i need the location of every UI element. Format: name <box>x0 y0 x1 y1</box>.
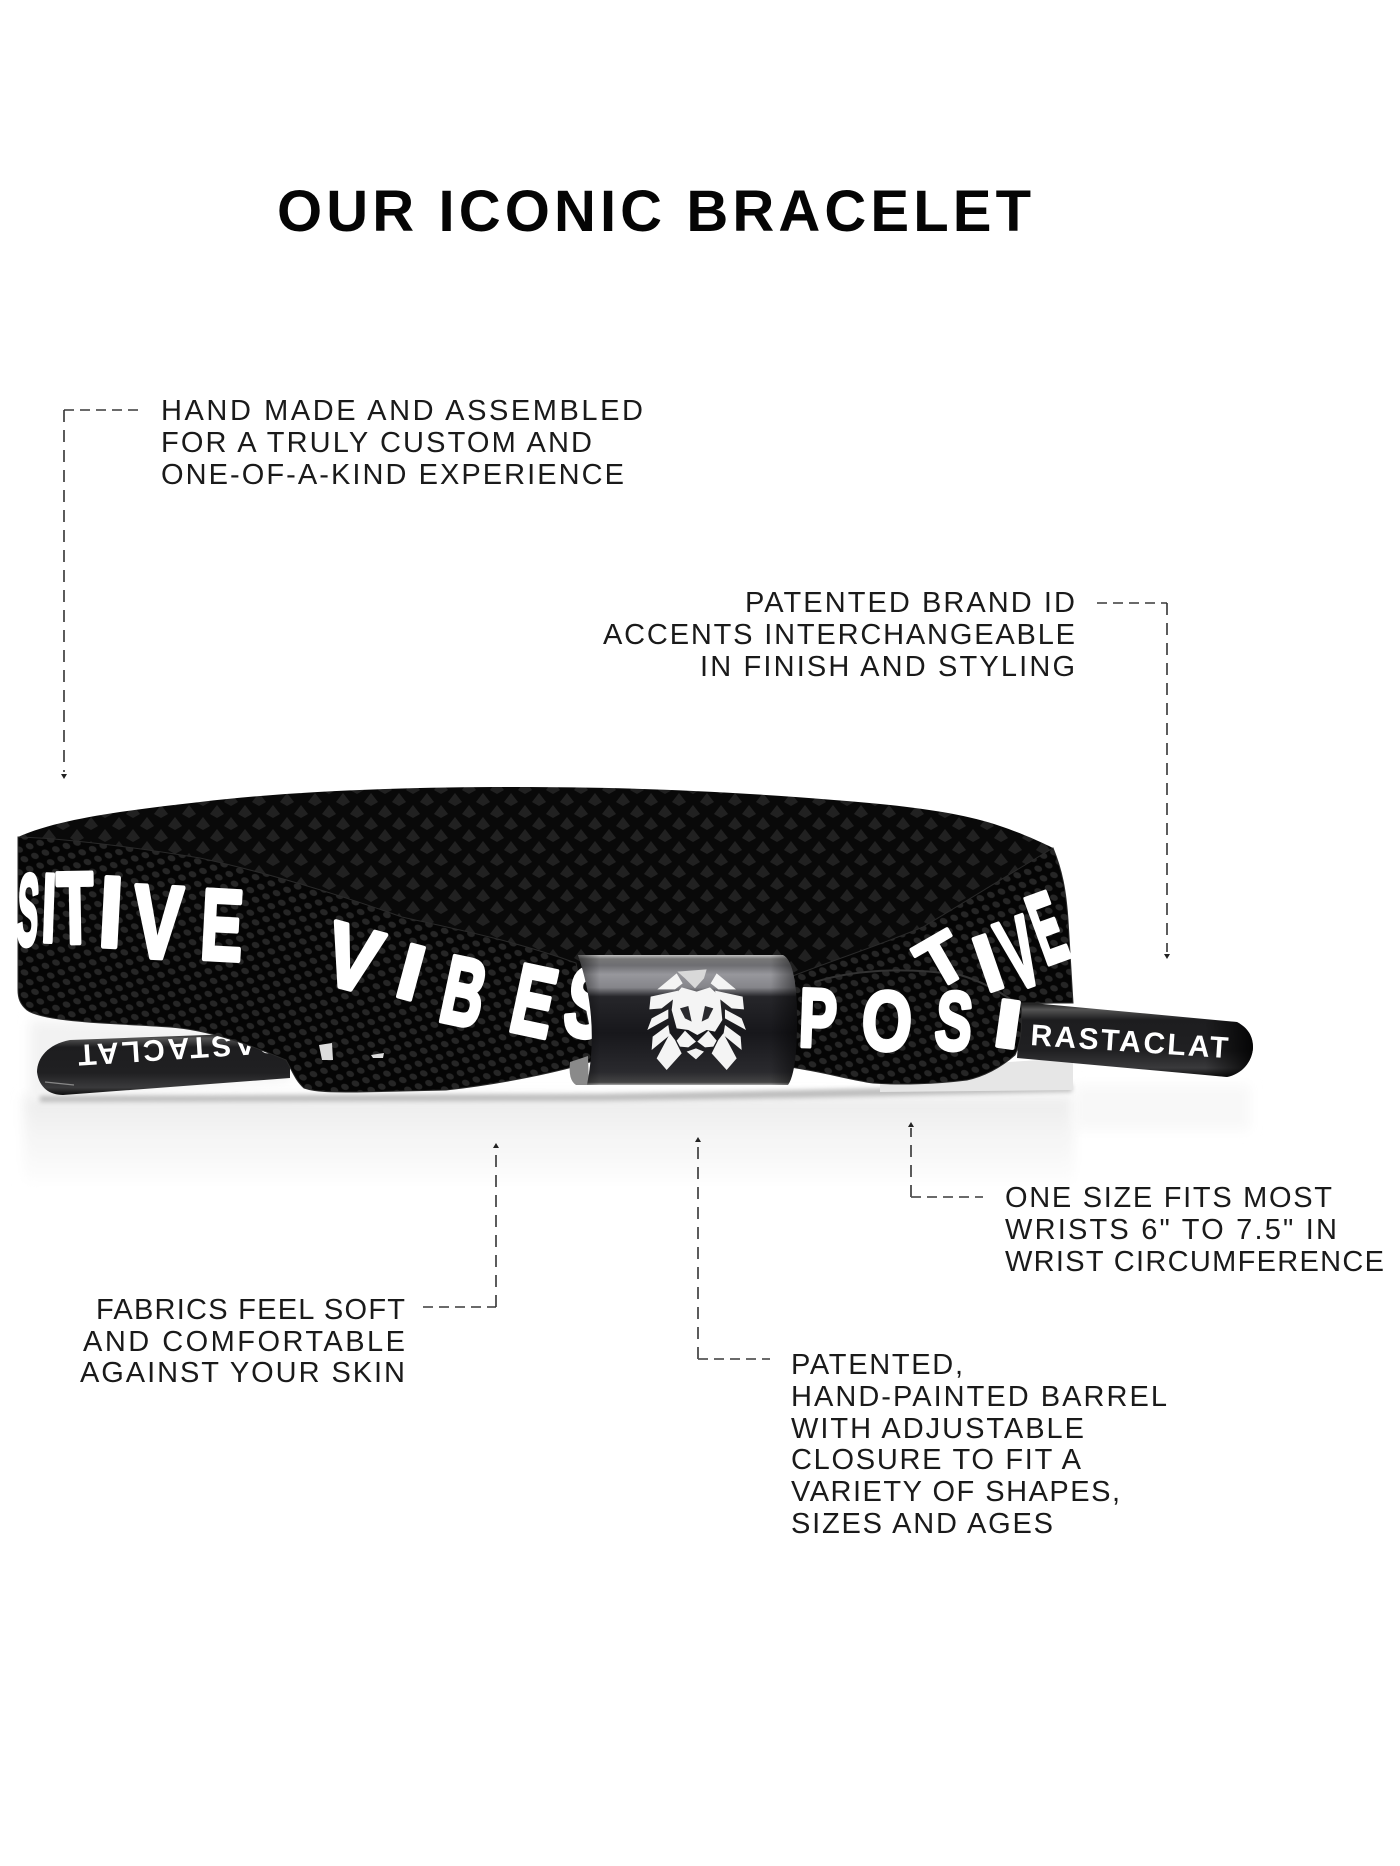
callout text: wrist size: WRIST CIRCUMFERENCE <box>1005 1246 1384 1278</box>
callout text: barrel: CLOSURE TO FIT A <box>791 1444 1082 1476</box>
painted word: VIBES <box>314 903 617 1061</box>
painted word: POSITIVE right: V <box>984 894 1054 1011</box>
callout text: brand id: IN FINISH AND STYLING <box>700 651 1075 683</box>
right tip brand text: RASTACLAT <box>1030 1019 1229 1065</box>
callout: fabrics <box>80 1143 499 1389</box>
barrel <box>570 955 797 1085</box>
callout: brand id <box>603 587 1170 959</box>
leader arrow: wrist size <box>908 1122 983 1197</box>
callout text: hand made <box>161 395 643 491</box>
callout text: barrel: VARIETY OF SHAPES, <box>791 1476 1120 1508</box>
left tip brand text: RASTACLAT <box>77 1025 282 1071</box>
leader arrow: hand made <box>61 410 138 779</box>
callout text: wrist size <box>1005 1182 1384 1278</box>
painted word: VIBES: I <box>388 928 434 1018</box>
callout text: wrist size: WRISTS 6" TO 7.5" IN <box>1005 1214 1337 1246</box>
callout text: fabrics: AGAINST YOUR SKIN <box>80 1357 405 1389</box>
painted word: POSITIVE left: T <box>56 851 94 965</box>
painted word: POSITIVE right: E <box>1015 872 1080 986</box>
callout text: fabrics: FABRICS FEEL SOFT <box>96 1294 405 1326</box>
callout text: barrel: SIZES AND AGES <box>791 1508 1053 1540</box>
left metal tip <box>37 1025 290 1095</box>
painted word: VIBES: S <box>557 947 617 1061</box>
painted word: VIBES: E <box>502 944 565 1059</box>
bracelet photo <box>14 787 1253 1186</box>
painted word: POSITIVE right: I <box>963 917 1013 1009</box>
painted word: VIBES: B <box>432 935 496 1049</box>
floor shadow and reflection <box>24 1020 1250 1186</box>
back of band <box>18 787 1073 1010</box>
callout text: brand id: ACCENTS INTERCHANGEABLE <box>603 619 1075 651</box>
painted word: POSITIVE left: I <box>96 855 126 969</box>
painted word: POSITIVE right: O <box>860 972 914 1069</box>
callout text: hand made: HAND MADE AND ASSEMBLED <box>161 395 643 427</box>
painted word: POSITIVE left: S <box>14 853 42 967</box>
painted word: POSITIVE left: I <box>40 855 58 963</box>
right metal tip <box>1017 1002 1253 1077</box>
callout text: hand made: ONE-OF-A-KIND EXPERIENCE <box>161 459 624 491</box>
callout text: brand id <box>603 587 1075 683</box>
painted word: VIBES: V <box>314 903 392 1014</box>
painted word: POSITIVE right: T <box>903 916 979 1005</box>
leader arrow: fabrics <box>423 1143 499 1307</box>
callout text: fabrics: AND COMFORTABLE <box>83 1326 405 1358</box>
leader arrow: barrel <box>695 1137 770 1359</box>
strap crossing ridge <box>815 970 1019 1005</box>
painted word: POSITIVE left: V <box>131 863 185 981</box>
painted word: POSITIVE left: E <box>198 868 246 982</box>
callout text: barrel: HAND-PAINTED BARREL <box>791 1381 1167 1413</box>
title: OUR ICONIC BRACELET <box>277 179 1031 244</box>
painted word: POSITIVE right: S <box>932 973 976 1069</box>
painted word: POSITIVE right: I <box>989 985 1027 1064</box>
paint fragments under strap <box>319 1043 384 1060</box>
callout text: fabrics <box>80 1294 405 1389</box>
callout text: barrel: PATENTED, <box>791 1349 963 1381</box>
icon: lion head logo <box>647 969 746 1070</box>
callout text: barrel <box>791 1349 1167 1540</box>
painted word: POSITIVE right: P <box>797 973 839 1066</box>
right strap <box>790 848 1073 1084</box>
callout: hand made <box>61 395 643 779</box>
left strap <box>18 837 596 1092</box>
callout: wrist size <box>908 1122 1384 1278</box>
callout text: hand made: FOR A TRULY CUSTOM AND <box>161 427 592 459</box>
painted word: POSITIVE right <box>797 872 1080 1069</box>
callout text: wrist size: ONE SIZE FITS MOST <box>1005 1182 1332 1214</box>
callout text: barrel: WITH ADJUSTABLE <box>791 1413 1084 1445</box>
leader arrow: brand id <box>1097 603 1170 959</box>
painted word: POSITIVE left <box>14 851 246 982</box>
callout text: brand id: PATENTED BRAND ID <box>745 587 1075 619</box>
callout: barrel <box>695 1137 1167 1540</box>
